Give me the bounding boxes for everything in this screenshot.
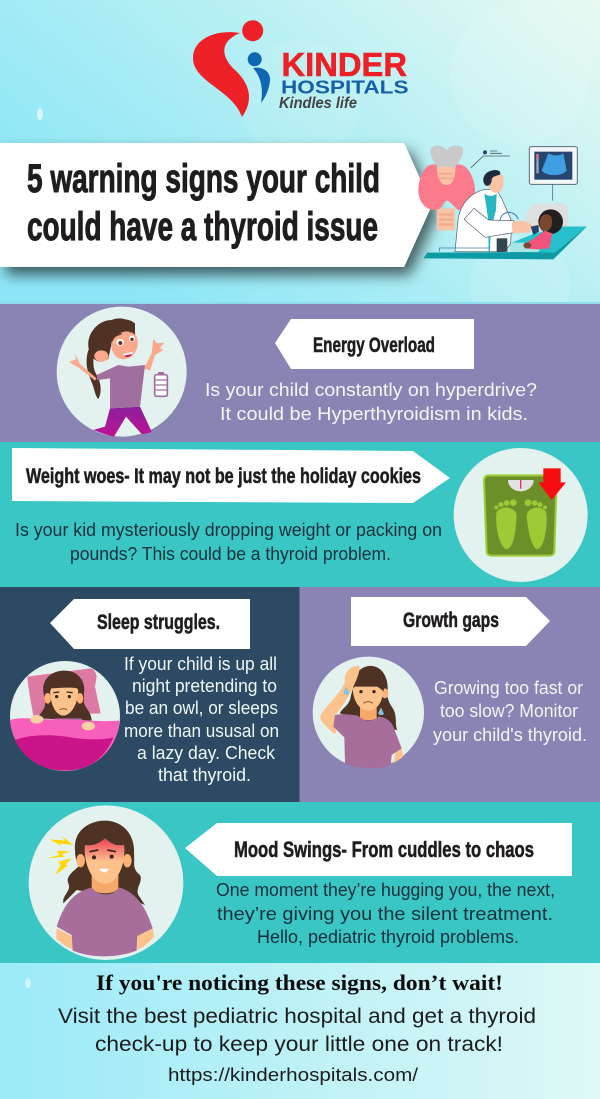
text: mood description: Hello, pediatric thyroid problems.	[257, 926, 519, 947]
title line 2: could have a thyroid issue	[27, 205, 378, 249]
banner: Weight woes: Weight woes- It may not be just the holiday cookies	[26, 465, 421, 488]
icon: weighing scale with down arrow	[454, 448, 588, 582]
banner: Energy Overload	[275, 319, 474, 369]
callout heading: If you're noticing these signs, don’t wait!	[96, 970, 503, 995]
text: mood description: they’re giving you the silent treatment.	[217, 903, 553, 924]
text: sleep description: If your child is up all	[124, 653, 277, 674]
text: growth description	[433, 677, 587, 745]
callout text	[58, 1005, 536, 1056]
text: growth description: too slow? Monitor	[440, 700, 578, 721]
text: sleep description: more than ususal on	[124, 720, 279, 741]
callout text: check-up to keep your little one on track!	[95, 1033, 503, 1056]
panel: Energy Overload	[0, 302, 600, 442]
text: energy overload description: Is your child constantly on hyperdrive?	[205, 379, 537, 400]
illustration: doctor scanning child with thyroid diagram	[418, 145, 587, 259]
child patient	[523, 209, 563, 249]
banner: Weight woes	[12, 448, 450, 503]
icon: tired girl holding forehead	[313, 657, 424, 768]
text: sleep description: be an owl, or sleeps	[125, 697, 278, 718]
text: weight description	[15, 519, 442, 564]
banner: Growth gaps: Growth gaps	[403, 609, 499, 632]
panel: call to action	[0, 963, 600, 1099]
title banner	[0, 143, 432, 267]
callout text: Visit the best pediatric hospital and get a thyroid	[58, 1005, 536, 1028]
text: mood description	[216, 879, 555, 947]
icon: girl awake in bed	[10, 661, 120, 771]
text: sleep description: night pretending to	[132, 675, 277, 696]
icon: battery	[155, 372, 167, 396]
icon: energetic girl with battery	[57, 307, 187, 437]
text: growth description: your child's thyroid.	[433, 724, 587, 745]
text: energy overload description	[205, 379, 537, 424]
thyroid diagram	[418, 145, 510, 230]
banner: Sleep struggles: Sleep struggles.	[97, 611, 220, 634]
text: mood description: One moment they’re hugging you, the next,	[216, 879, 555, 900]
banner: Mood Swings	[185, 823, 572, 876]
banner: Energy Overload: Energy Overload	[313, 334, 435, 357]
logo tagline: Kindles life	[279, 95, 357, 112]
text: sleep description	[124, 653, 279, 785]
text: sleep description: a lazy day. Check	[137, 742, 276, 763]
icon: logo mark	[193, 20, 270, 117]
panel: Sleep struggles	[0, 587, 300, 802]
panel: Weight woes	[0, 442, 600, 587]
doctor	[439, 170, 539, 252]
panel: Mood Swings	[0, 802, 600, 963]
banner: Sleep struggles	[50, 599, 250, 649]
text: energy overload description: It could be Hyperthyroidism in kids.	[220, 403, 528, 424]
ultrasound monitor	[525, 147, 577, 228]
text: weight description: Is your kid mysteriously dropping weight or packing on	[15, 519, 442, 540]
logo wordmark KINDER: KINDER	[282, 46, 407, 83]
logo: Kinder Hospitals	[193, 20, 408, 117]
website link: https://kinderhospitals.com/	[168, 1064, 419, 1085]
logo wordmark HOSPITALS: HOSPITALS	[281, 76, 408, 98]
text: sleep description: that thyroid.	[158, 764, 251, 785]
banner: Growth gaps	[351, 597, 550, 646]
panel: Growth gaps	[300, 587, 600, 802]
bed	[423, 227, 587, 259]
text: growth description: Growing too fast or	[434, 677, 583, 698]
title line 1: 5 warning signs your child	[27, 157, 380, 201]
page background	[0, 0, 600, 335]
text: weight description: pounds? This could be a thyroid problem.	[70, 543, 391, 564]
icon: girl with headache	[29, 805, 183, 960]
